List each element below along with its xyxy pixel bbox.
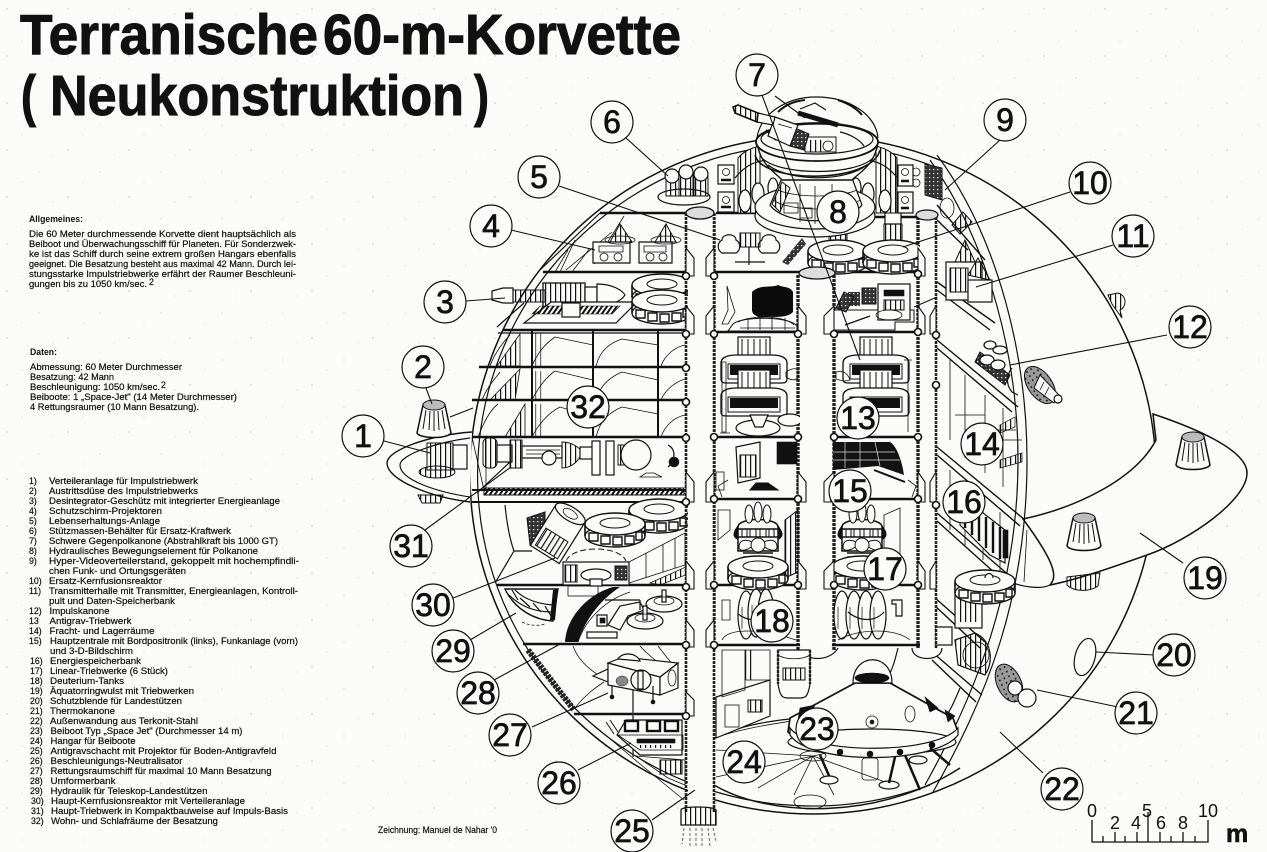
numbered legend: Hydraulisches Bewegungselement für Polkanone bbox=[49, 546, 258, 556]
icon: reservoir tanks 6 bbox=[658, 165, 710, 205]
left shaft bbox=[681, 207, 716, 848]
numbered legend: Desintegrator-Geschütz mit integrierter Energieanlage bbox=[49, 496, 280, 506]
callout 18: 18 bbox=[754, 603, 790, 639]
centre shaft bbox=[798, 267, 838, 658]
glass dome bbox=[757, 97, 878, 138]
title: ( bbox=[21, 64, 36, 128]
text block: Allgemeines: geeignet. Die Besatzung besteht aus maximal 42 Mann. Durch lei- bbox=[29, 259, 296, 269]
panel: neutraliser deck 26 bbox=[584, 717, 685, 800]
text block: Allgemeines: Allgemeines: bbox=[29, 214, 83, 224]
text block: Daten: Beiboote: 1 „Space-Jet" (14 Meter Durchmesser) bbox=[30, 392, 237, 402]
callout 6: 6 bbox=[603, 104, 621, 140]
callout 2 bbox=[402, 346, 444, 388]
striped housing walls bbox=[718, 146, 913, 213]
text block: Allgemeines: 2 bbox=[149, 277, 154, 287]
numbered legend: Außenwandung aus Terkonit-Stahl bbox=[50, 716, 198, 726]
numbered legend: 25) bbox=[30, 746, 43, 756]
callout 8: 8 bbox=[829, 194, 847, 230]
numbered legend: Wohn- und Schlafräume der Besatzung bbox=[51, 816, 218, 826]
callout 10: 10 bbox=[1072, 165, 1108, 201]
callout 31: 31 bbox=[393, 528, 429, 564]
callout 7: 7 bbox=[748, 57, 766, 93]
numbered legend: 11) bbox=[29, 586, 41, 596]
callout 9: 9 bbox=[996, 102, 1014, 138]
inner hull line bbox=[478, 144, 930, 806]
numbered legend: 20) bbox=[30, 696, 43, 706]
deck rivets bbox=[682, 270, 940, 720]
numbered legend: 26) bbox=[30, 756, 43, 766]
text block: Allgemeines: ke ist das Schiff durch seine extrem großen Hangars ebenfalls bbox=[29, 249, 297, 259]
panel: main engine deck 31 bbox=[472, 437, 686, 502]
icon: black power core bbox=[752, 285, 793, 318]
panel: upper left compartments bbox=[472, 165, 710, 437]
cut edge of hull bbox=[925, 155, 1027, 792]
outer sphere hull bbox=[470, 136, 1156, 814]
numbered legend: Haupt-Triebwerk in Kompaktbauweise auf Impuls-Basis bbox=[51, 806, 289, 816]
numbered legend: Beschleunigungs-Neutralisator bbox=[50, 756, 183, 766]
scale bar bbox=[1087, 801, 1248, 848]
numbered legend: Rettungsraumschiff für maximal 10 Mann Besatzung bbox=[50, 766, 272, 776]
numbered legend: 17) bbox=[30, 666, 43, 676]
equipment column bbox=[716, 650, 770, 738]
numbered legend: Lebenserhaltungs-Anlage bbox=[49, 516, 160, 526]
numbered legend: Energiespeicherbank bbox=[50, 656, 142, 666]
left equator ring bbox=[387, 408, 473, 503]
callout 6 bbox=[591, 101, 633, 143]
panel: lifeboat bay 27 bbox=[573, 646, 686, 757]
callout 30: 30 bbox=[415, 587, 451, 623]
numbered legend: Schwere Gegenpolkanone (Abstrahlkraft bis 1000 GT) bbox=[49, 536, 278, 546]
callout 27: 27 bbox=[492, 717, 528, 753]
panel: linear engines 17 bbox=[718, 502, 900, 590]
callout 28: 28 bbox=[460, 675, 496, 711]
numbered legend: 31) bbox=[31, 806, 44, 816]
scale bar: m bbox=[1226, 820, 1248, 848]
numbered legend: pult und Daten-Speicherbank bbox=[49, 596, 176, 606]
callout 2: 2 bbox=[414, 349, 432, 385]
text block: Daten: 2 bbox=[161, 380, 166, 390]
numbered legend: 15) bbox=[29, 636, 42, 646]
icon: shield projectors 4 bbox=[593, 224, 681, 263]
callout 7 bbox=[736, 54, 778, 96]
numbered legend: Ersatz-Kernfusionsreaktor bbox=[49, 576, 162, 586]
numbered legend: Schutzblende für Landestützen bbox=[50, 696, 182, 706]
text block: Daten: 4 Rettungsraumer (10 Mann Besatzung). bbox=[30, 402, 199, 412]
numbered legend: Hydraulik für Teleskop-Landestützen bbox=[50, 786, 208, 796]
antigrav shafts bbox=[681, 207, 942, 848]
numbered legend: Beiboot Typ „Space Jet" (Durchmesser 14 m) bbox=[50, 726, 243, 736]
numbered legend: 1) bbox=[29, 476, 37, 486]
numbered legend: Austrittsdüse des Impulstriebwerks bbox=[49, 486, 199, 496]
panel: central upper rooms bbox=[714, 210, 923, 650]
callout 13: 13 bbox=[840, 400, 876, 436]
credit line: Zeichnung: Manuel de Nahar '0 bbox=[378, 825, 497, 835]
panel: antigrav engines 13 bbox=[720, 337, 912, 436]
panel: right side cargo rooms 14 bbox=[912, 164, 1025, 702]
numbered legend: Stützmassen-Behälter für Ersatz-Kraftwerk bbox=[49, 526, 232, 536]
chamfered floor plates bbox=[686, 248, 936, 716]
numbered legend: 2) bbox=[29, 486, 37, 496]
numbered legend: chen Funk- und Ortungsgeräten bbox=[49, 566, 186, 576]
energy storage bank 16 bbox=[960, 495, 1008, 563]
spaceship hull cutaway bbox=[387, 136, 1247, 814]
title: ) bbox=[474, 64, 489, 128]
spacecraft 23 bbox=[788, 660, 958, 790]
bowl and rings bbox=[755, 123, 880, 180]
scale bar: 10 bbox=[1198, 801, 1218, 821]
callout 15: 15 bbox=[832, 473, 868, 509]
numbered legend: 27) bbox=[30, 766, 43, 776]
scale bar: 0 bbox=[1087, 801, 1097, 821]
callout 5 bbox=[518, 156, 560, 198]
text block: Allgemeines: stungsstarke Impulstriebwerke erfährt der Raumer Beschleuni- bbox=[29, 269, 296, 279]
callout 23: 23 bbox=[799, 711, 835, 747]
title: 60-m-Korvette bbox=[323, 3, 681, 67]
icon: hydraulic drum 29 bbox=[505, 589, 558, 625]
numbered legend: Transmitterhalle mit Transmitter, Energieanlagen, Kontroll- bbox=[49, 586, 298, 596]
numbered legend: 32) bbox=[31, 816, 44, 826]
callout 32: 32 bbox=[570, 389, 606, 425]
text block: Daten: Besatzung: 42 Mann bbox=[30, 372, 114, 382]
callout 22: 22 bbox=[1044, 771, 1080, 807]
callout 1: 1 bbox=[354, 418, 372, 454]
numbered legend bbox=[29, 476, 299, 826]
callout 4: 4 bbox=[482, 208, 500, 244]
icon: disintegrator gun 3 bbox=[492, 274, 692, 324]
panel: lower hangar 24 bbox=[714, 648, 960, 809]
numbered legend: 12) bbox=[29, 606, 42, 616]
callout 29: 29 bbox=[435, 633, 471, 669]
numbered legend: 8) bbox=[29, 546, 37, 556]
callout 8 bbox=[817, 191, 859, 233]
scale bar: 6 bbox=[1156, 813, 1166, 833]
lower cylinder bbox=[778, 650, 810, 698]
callout 3 bbox=[424, 281, 466, 323]
text block: Daten bbox=[30, 347, 237, 412]
numbered legend: und 3-D-Bildschirm bbox=[50, 646, 133, 656]
numbered legend: Hangar für Beiboote bbox=[50, 736, 136, 746]
icon: small port bbox=[1108, 293, 1125, 318]
panel: hydraulics and converter deck 28-29 bbox=[505, 586, 686, 644]
numbered callouts bbox=[342, 54, 1226, 852]
life support 5 bbox=[718, 233, 806, 265]
text block: Daten: Beschleunigung: 1050 km/sec. bbox=[30, 382, 160, 392]
numbered legend: Impulskanone bbox=[50, 606, 110, 616]
callout 17: 17 bbox=[867, 551, 903, 587]
numbered legend: 30) bbox=[31, 796, 44, 806]
text block: Daten: Daten: bbox=[30, 347, 57, 357]
numbered legend: Antigravschacht mit Projektor für Boden-Antigravfeld bbox=[50, 746, 277, 756]
numbered legend: Linear-Triebwerke (6 Stück) bbox=[50, 666, 168, 676]
callout 25: 25 bbox=[614, 813, 650, 849]
title: Terranische bbox=[20, 3, 318, 67]
exterior details: cannons and covers bbox=[417, 293, 1210, 707]
numbered legend: 16) bbox=[30, 656, 43, 666]
numbered legend: 10) bbox=[29, 576, 42, 586]
right equator ring bbox=[1010, 414, 1247, 587]
fusion reactors 10 bbox=[808, 210, 923, 274]
numbered legend: 28) bbox=[30, 776, 43, 786]
panel: pole cannon dome 7-8 bbox=[718, 97, 913, 237]
numbered legend: Antigrav-Triebwerk bbox=[50, 616, 132, 626]
title bbox=[20, 3, 681, 128]
panel: command centre 15 bbox=[716, 442, 916, 497]
room walls: crew quarters 32 bbox=[478, 330, 685, 437]
numbered legend: 18) bbox=[30, 676, 43, 686]
numbered legend: Äquatorringwulst mit Triebwerken bbox=[50, 686, 194, 696]
pole cannon bbox=[733, 103, 864, 152]
text block: Allgemeines: Beiboot und Überwachungsschiff für Planeten. Für Sonderzwek- bbox=[29, 239, 296, 249]
callout 11: 11 bbox=[1116, 218, 1150, 254]
callout 5: 5 bbox=[530, 159, 548, 195]
numbered legend: 23) bbox=[30, 726, 43, 736]
numbered legend: Schutzschirm-Projektoren bbox=[49, 506, 162, 516]
numbered legend: Fracht- und Lagerräume bbox=[50, 626, 155, 636]
callout 3: 3 bbox=[436, 284, 454, 320]
panel: deuterium tanks 18 bbox=[722, 589, 910, 640]
numbered legend: Umformerbank bbox=[50, 776, 116, 786]
callout 21: 21 bbox=[1118, 695, 1154, 731]
numbered legend: 6) bbox=[29, 526, 37, 536]
numbered legend: 24) bbox=[30, 736, 43, 746]
numbered legend: 9) bbox=[29, 556, 37, 566]
scale bar: 5 bbox=[1142, 801, 1152, 821]
callout 4 bbox=[470, 205, 512, 247]
numbered legend: 7) bbox=[29, 536, 37, 546]
numbered legend: Verteileranlage für Impulstriebwerk bbox=[49, 476, 199, 486]
text block: Daten: Abmessung: 60 Meter Durchmesser bbox=[30, 362, 182, 372]
scale bar: 4 bbox=[1131, 813, 1141, 833]
text block: Allgemeines: Die 60 Meter durchmessende Korvette dient hauptsächlich als bbox=[29, 229, 297, 239]
transmitter hall 11 bbox=[820, 284, 914, 330]
text block: Allgemeines bbox=[29, 214, 297, 289]
icon: impulse cannon port bbox=[1018, 361, 1062, 409]
panel: reactor deck 30 bbox=[495, 499, 689, 586]
numbered legend: 13 bbox=[29, 616, 39, 626]
callout 24: 24 bbox=[726, 744, 762, 780]
numbered legend: Thermokanone bbox=[50, 706, 115, 716]
title: Neukonstruktion bbox=[50, 64, 464, 128]
callout 16: 16 bbox=[946, 484, 982, 520]
impulse cannon 12 bbox=[975, 341, 1018, 395]
callout 26: 26 bbox=[541, 765, 577, 801]
right shaft bbox=[912, 210, 942, 658]
numbered legend: 5) bbox=[29, 516, 37, 526]
numbered legend: 4) bbox=[29, 506, 37, 516]
numbered legend: 14) bbox=[29, 626, 42, 636]
callout 12: 12 bbox=[1172, 309, 1208, 345]
hull lower band bbox=[528, 650, 574, 710]
numbered legend: Hauptzentrale mit Bordpositronik (links), Funkanlage (vorn) bbox=[50, 636, 298, 646]
callout 19: 19 bbox=[1187, 560, 1223, 596]
icon: landing strut cover 20 bbox=[1070, 636, 1100, 678]
numbered legend: 19) bbox=[30, 686, 43, 696]
icon: right top boxes bbox=[946, 240, 992, 302]
numbered legend: 3) bbox=[29, 496, 37, 506]
callout 11 bbox=[1112, 215, 1154, 257]
icon: thermo cannon 21 bbox=[990, 660, 1036, 707]
hydraulic element 8 bbox=[755, 178, 875, 237]
text block: Allgemeines: gungen bis zu 1050 km/sec. bbox=[29, 279, 147, 289]
numbered legend: Hyper-Videoverteilerstand, gekoppelt mit hochempfindli- bbox=[49, 556, 299, 566]
callout 9 bbox=[984, 99, 1026, 141]
numbered legend: Haupt-Kernfusionsreaktor mit Verteileranlage bbox=[51, 796, 245, 806]
numbered legend: 22) bbox=[30, 716, 43, 726]
numbered legend: 21) bbox=[30, 706, 43, 716]
callout 1 bbox=[342, 415, 384, 457]
leader lines bbox=[384, 95, 1183, 820]
numbered legend: Deuterium-Tanks bbox=[50, 676, 125, 686]
hyper video station 9 bbox=[912, 164, 972, 234]
icon: lifeboat bbox=[593, 654, 678, 704]
converter bank 28 bbox=[565, 586, 682, 642]
callout 20: 20 bbox=[1156, 637, 1192, 673]
lower right machines bbox=[935, 570, 1015, 675]
scale bar: 8 bbox=[1178, 813, 1188, 833]
numbered legend: 29) bbox=[30, 786, 43, 796]
scale bar: 2 bbox=[1110, 813, 1120, 833]
callout 14: 14 bbox=[964, 426, 1000, 462]
